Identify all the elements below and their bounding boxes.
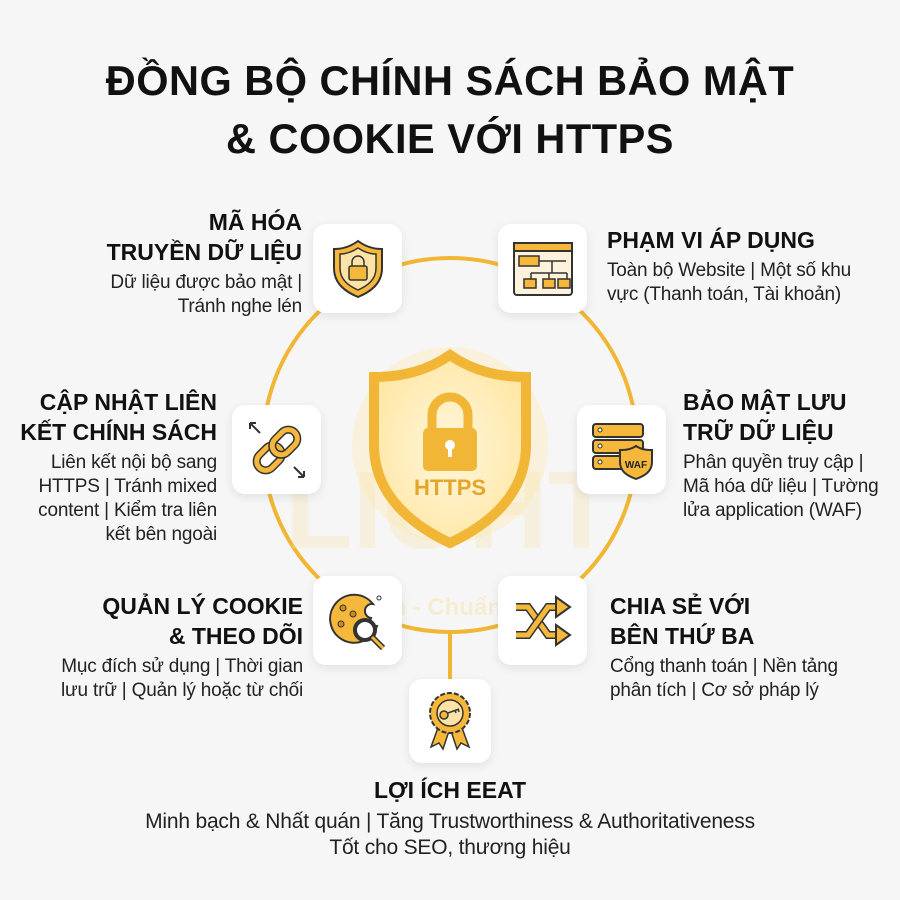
text: Phạm vi áp dụng: Toàn bộ Website | Một số khu [607,260,851,281]
icon box: server WAF [577,405,666,494]
text: Quản lý cookie: QUẢN LÝ COOKIE [102,593,303,619]
icon box: sitemap [498,224,587,313]
icon box: cookie magnifier [313,576,402,665]
text: Mã hóa truyền dữ liệu [106,209,302,317]
title: ĐỒNG BỘ CHÍNH SÁCH BẢO MẬT [106,57,794,104]
icon box: server WAF: WAF [624,460,647,470]
title: & COOKIE VỚI HTTPS [226,115,674,162]
text: Bảo mật lưu trữ dữ liệu: TRỮ DỮ LIỆU [683,419,834,445]
text: Bảo mật lưu trữ dữ liệu: Phân quyền truy cập | [683,452,863,473]
text: Chia sẻ với bên thứ ba: CHIA SẺ VỚI [610,593,750,619]
icon box: shield lock [313,224,402,313]
text: Cập nhật liên kết chính sách: content | Kiểm tra liên [38,500,217,521]
text: Phạm vi áp dụng [607,227,851,305]
text: Quản lý cookie: lưu trữ | Quản lý hoặc từ chối [61,680,303,701]
text: Cập nhật liên kết chính sách: Liên kết nội bộ sang [51,452,217,473]
text: Bảo mật lưu trữ dữ liệu [683,389,878,521]
text: Cập nhật liên kết chính sách: CẬP NHẬT LIÊN [40,389,217,415]
background ring: LIGHT [285,449,615,572]
text: Cập nhật liên kết chính sách: kết bên ngoài [106,524,217,545]
title [106,57,794,162]
text: Chia sẻ với bên thứ ba: Cổng thanh toán | Nền tảng [610,656,838,677]
text: Lợi ích EEAT: LỢI ÍCH EEAT [374,777,526,803]
icon box: shuffle arrows [498,576,587,665]
text: Cập nhật liên kết chính sách: HTTPS | Tránh mixed [38,476,217,497]
text: Phạm vi áp dụng: vực (Thanh toán, Tài khoản) [607,284,841,305]
background ring: Nhanh - Chuẩn - Đẹp [331,594,569,621]
text: Cập nhật liên kết chính sách [20,389,217,545]
icon box: chain link [232,405,321,494]
text: Phạm vi áp dụng: PHẠM VI ÁP DỤNG [607,227,815,253]
text: Quản lý cookie [61,593,303,701]
text: Mã hóa truyền dữ liệu: MÃ HÓA [209,209,302,235]
icon box: award key badge [409,679,491,763]
text: Chia sẻ với bên thứ ba [610,593,838,701]
text: Mã hóa truyền dữ liệu: TRUYỀN DỮ LIỆU [107,239,302,265]
center shield HTTPS [352,347,548,548]
text: Cập nhật liên kết chính sách: KẾT CHÍNH SÁCH [20,419,217,445]
text: Mã hóa truyền dữ liệu: Tránh nghe lén [178,296,302,317]
text: Chia sẻ với bên thứ ba: BÊN THỨ BA [610,623,754,649]
text: Bảo mật lưu trữ dữ liệu: lửa application (WAF) [683,500,862,521]
text: Quản lý cookie: Mục đích sử dụng | Thời gian [61,656,303,677]
text: Mã hóa truyền dữ liệu: Dữ liệu được bảo mật | [110,272,302,293]
text: Bảo mật lưu trữ dữ liệu: Mã hóa dữ liệu | Tường [683,476,878,497]
text: Lợi ích EEAT [145,777,755,859]
text: Chia sẻ với bên thứ ba: phân tích | Cơ sở pháp lý [610,680,819,701]
text: Lợi ích EEAT: Tốt cho SEO, thương hiệu [329,836,571,859]
text: Lợi ích EEAT: Minh bạch & Nhất quán | Tăng Trustworthiness & Authoritativeness [145,810,755,833]
text: Bảo mật lưu trữ dữ liệu: BẢO MẬT LƯU [683,389,846,415]
center shield HTTPS: HTTPS [414,475,486,500]
text: Quản lý cookie: & THEO DÕI [169,623,303,649]
